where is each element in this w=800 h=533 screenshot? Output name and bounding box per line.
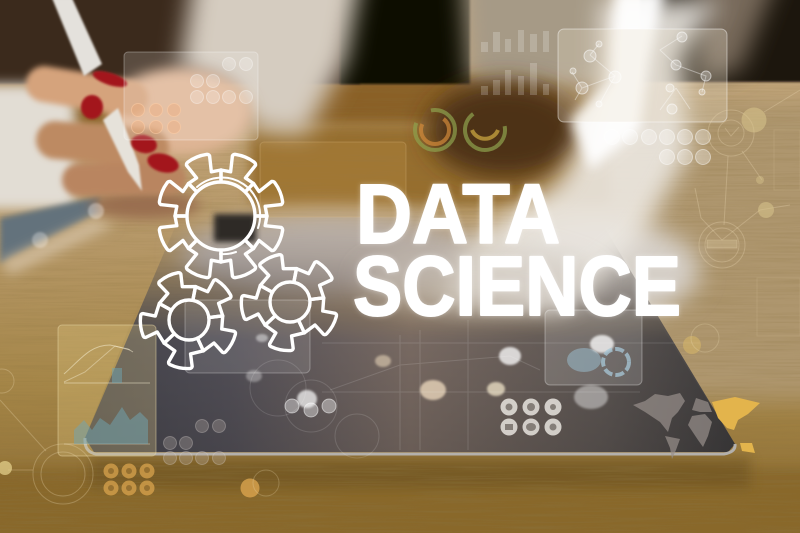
network nodes on the right of the desk xyxy=(695,90,800,336)
panel: pie and donut chart xyxy=(545,310,642,385)
people icons xyxy=(604,130,710,164)
network: light bulb node, lower left xyxy=(0,369,93,504)
lower-left gear xyxy=(138,267,241,372)
shirt and arm, blurred xyxy=(180,0,780,135)
icon group: people on the tablet xyxy=(285,399,336,417)
panel: network diagram top right xyxy=(558,29,727,122)
tablet computer xyxy=(85,214,735,454)
icon group: white icons on the tablet xyxy=(500,398,562,436)
pale blurred area behind the tablet top xyxy=(180,213,700,320)
bright white flare through the centre right xyxy=(360,0,720,314)
panel: amber panel behind the gears xyxy=(260,142,406,217)
stylus xyxy=(52,0,142,191)
white sheet and phone on the left of the desk xyxy=(0,84,115,275)
world map xyxy=(633,393,760,459)
dollar node beside the tablet, right xyxy=(683,324,719,354)
lower-right gear xyxy=(239,249,342,354)
donut charts xyxy=(415,107,508,153)
dollar node near the tablet base xyxy=(240,470,279,498)
hand holding a stylus xyxy=(44,0,252,219)
gear icons xyxy=(138,150,342,372)
top gear xyxy=(155,150,287,282)
icon group: grey icons on the tablet edge xyxy=(164,420,226,464)
panel: faint panel under the gears xyxy=(185,300,310,373)
panel: line and bar charts, lower left xyxy=(58,325,156,456)
bar chart: faint bars on the shirt xyxy=(481,30,549,95)
icon group: amber icons on the desk xyxy=(104,464,154,496)
title xyxy=(353,167,681,333)
title: DATA xyxy=(356,167,560,261)
glowing data nodes on the tablet xyxy=(32,203,608,409)
title: SCIENCE xyxy=(353,239,681,333)
network lines on the tablet xyxy=(250,320,700,458)
dark sleeve behind the centre xyxy=(427,82,583,178)
red nails xyxy=(81,68,181,176)
dollar and nodes xyxy=(742,108,774,218)
panel: top-left icons xyxy=(124,52,258,140)
